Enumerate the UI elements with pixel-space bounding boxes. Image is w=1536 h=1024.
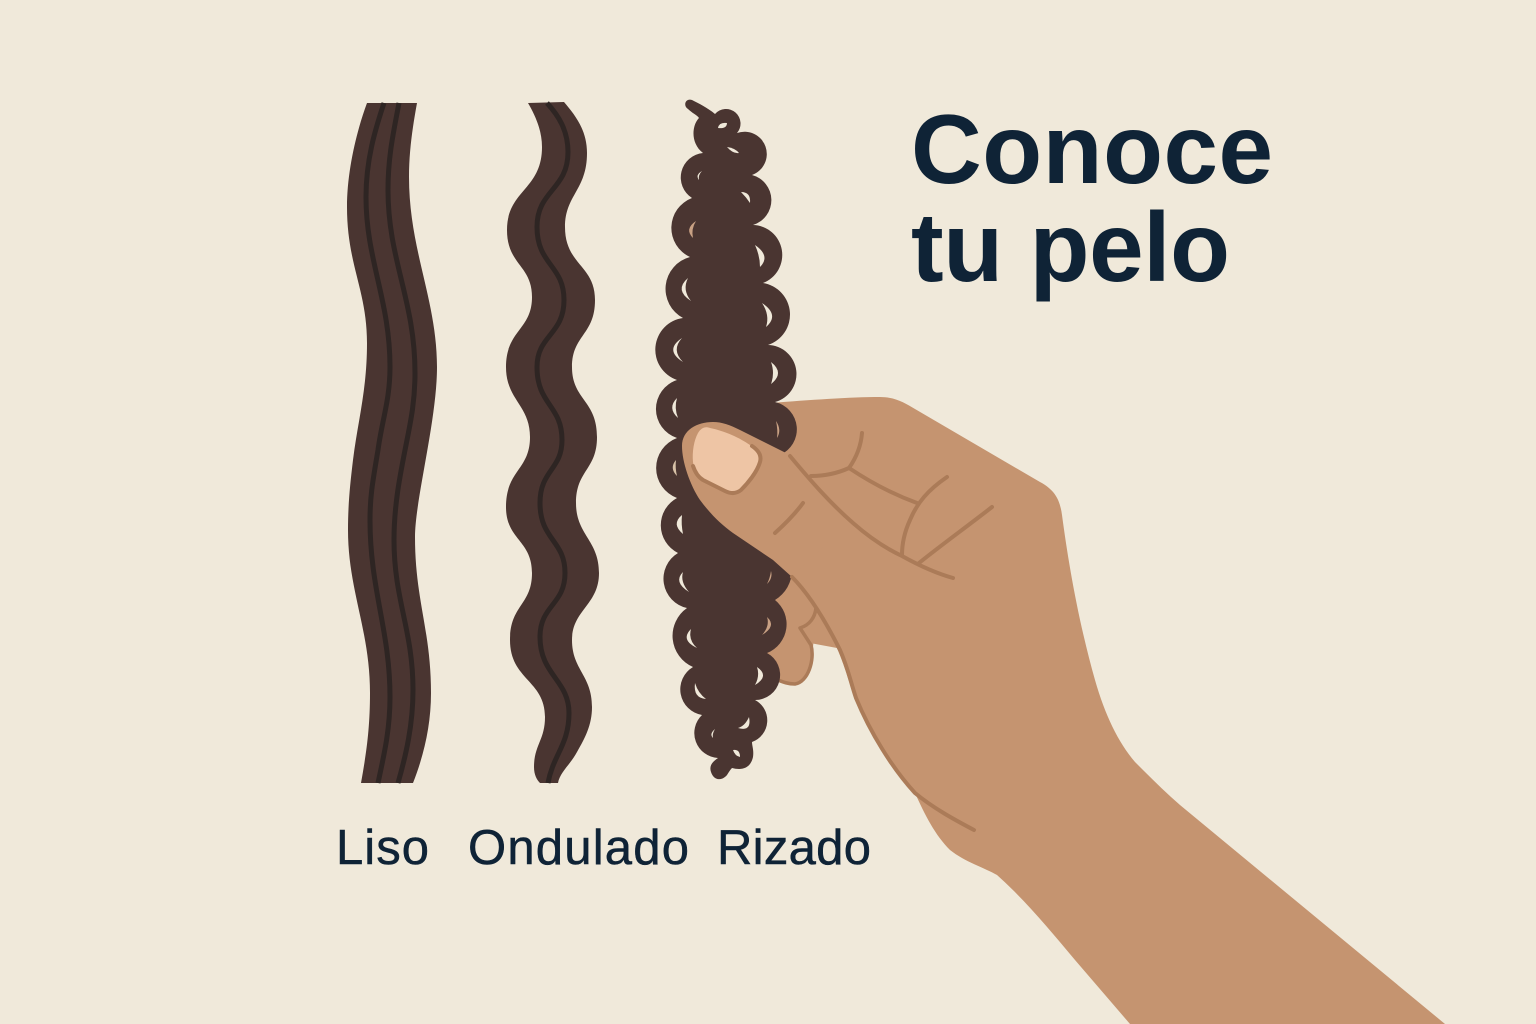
hand: creases and contour lines bbox=[775, 433, 992, 830]
hair strand: curly (rizado) bbox=[655, 100, 797, 779]
icon: thumbnail bbox=[693, 427, 761, 493]
hand: folded finger behind the curls bbox=[755, 577, 817, 684]
label: rizado: Rizado bbox=[717, 821, 871, 875]
title bbox=[911, 94, 1273, 302]
label: ondulado: Ondulado bbox=[468, 821, 689, 875]
hand: palm and wrist bbox=[770, 397, 1445, 1024]
title: Conoce bbox=[911, 94, 1273, 204]
hair strand: wavy (ondulado) bbox=[506, 102, 599, 783]
title: tu pelo bbox=[911, 192, 1230, 302]
hair strand: straight (liso) bbox=[347, 103, 437, 783]
hand: thumb over the curls bbox=[682, 422, 830, 577]
label: liso: Liso bbox=[336, 821, 429, 875]
